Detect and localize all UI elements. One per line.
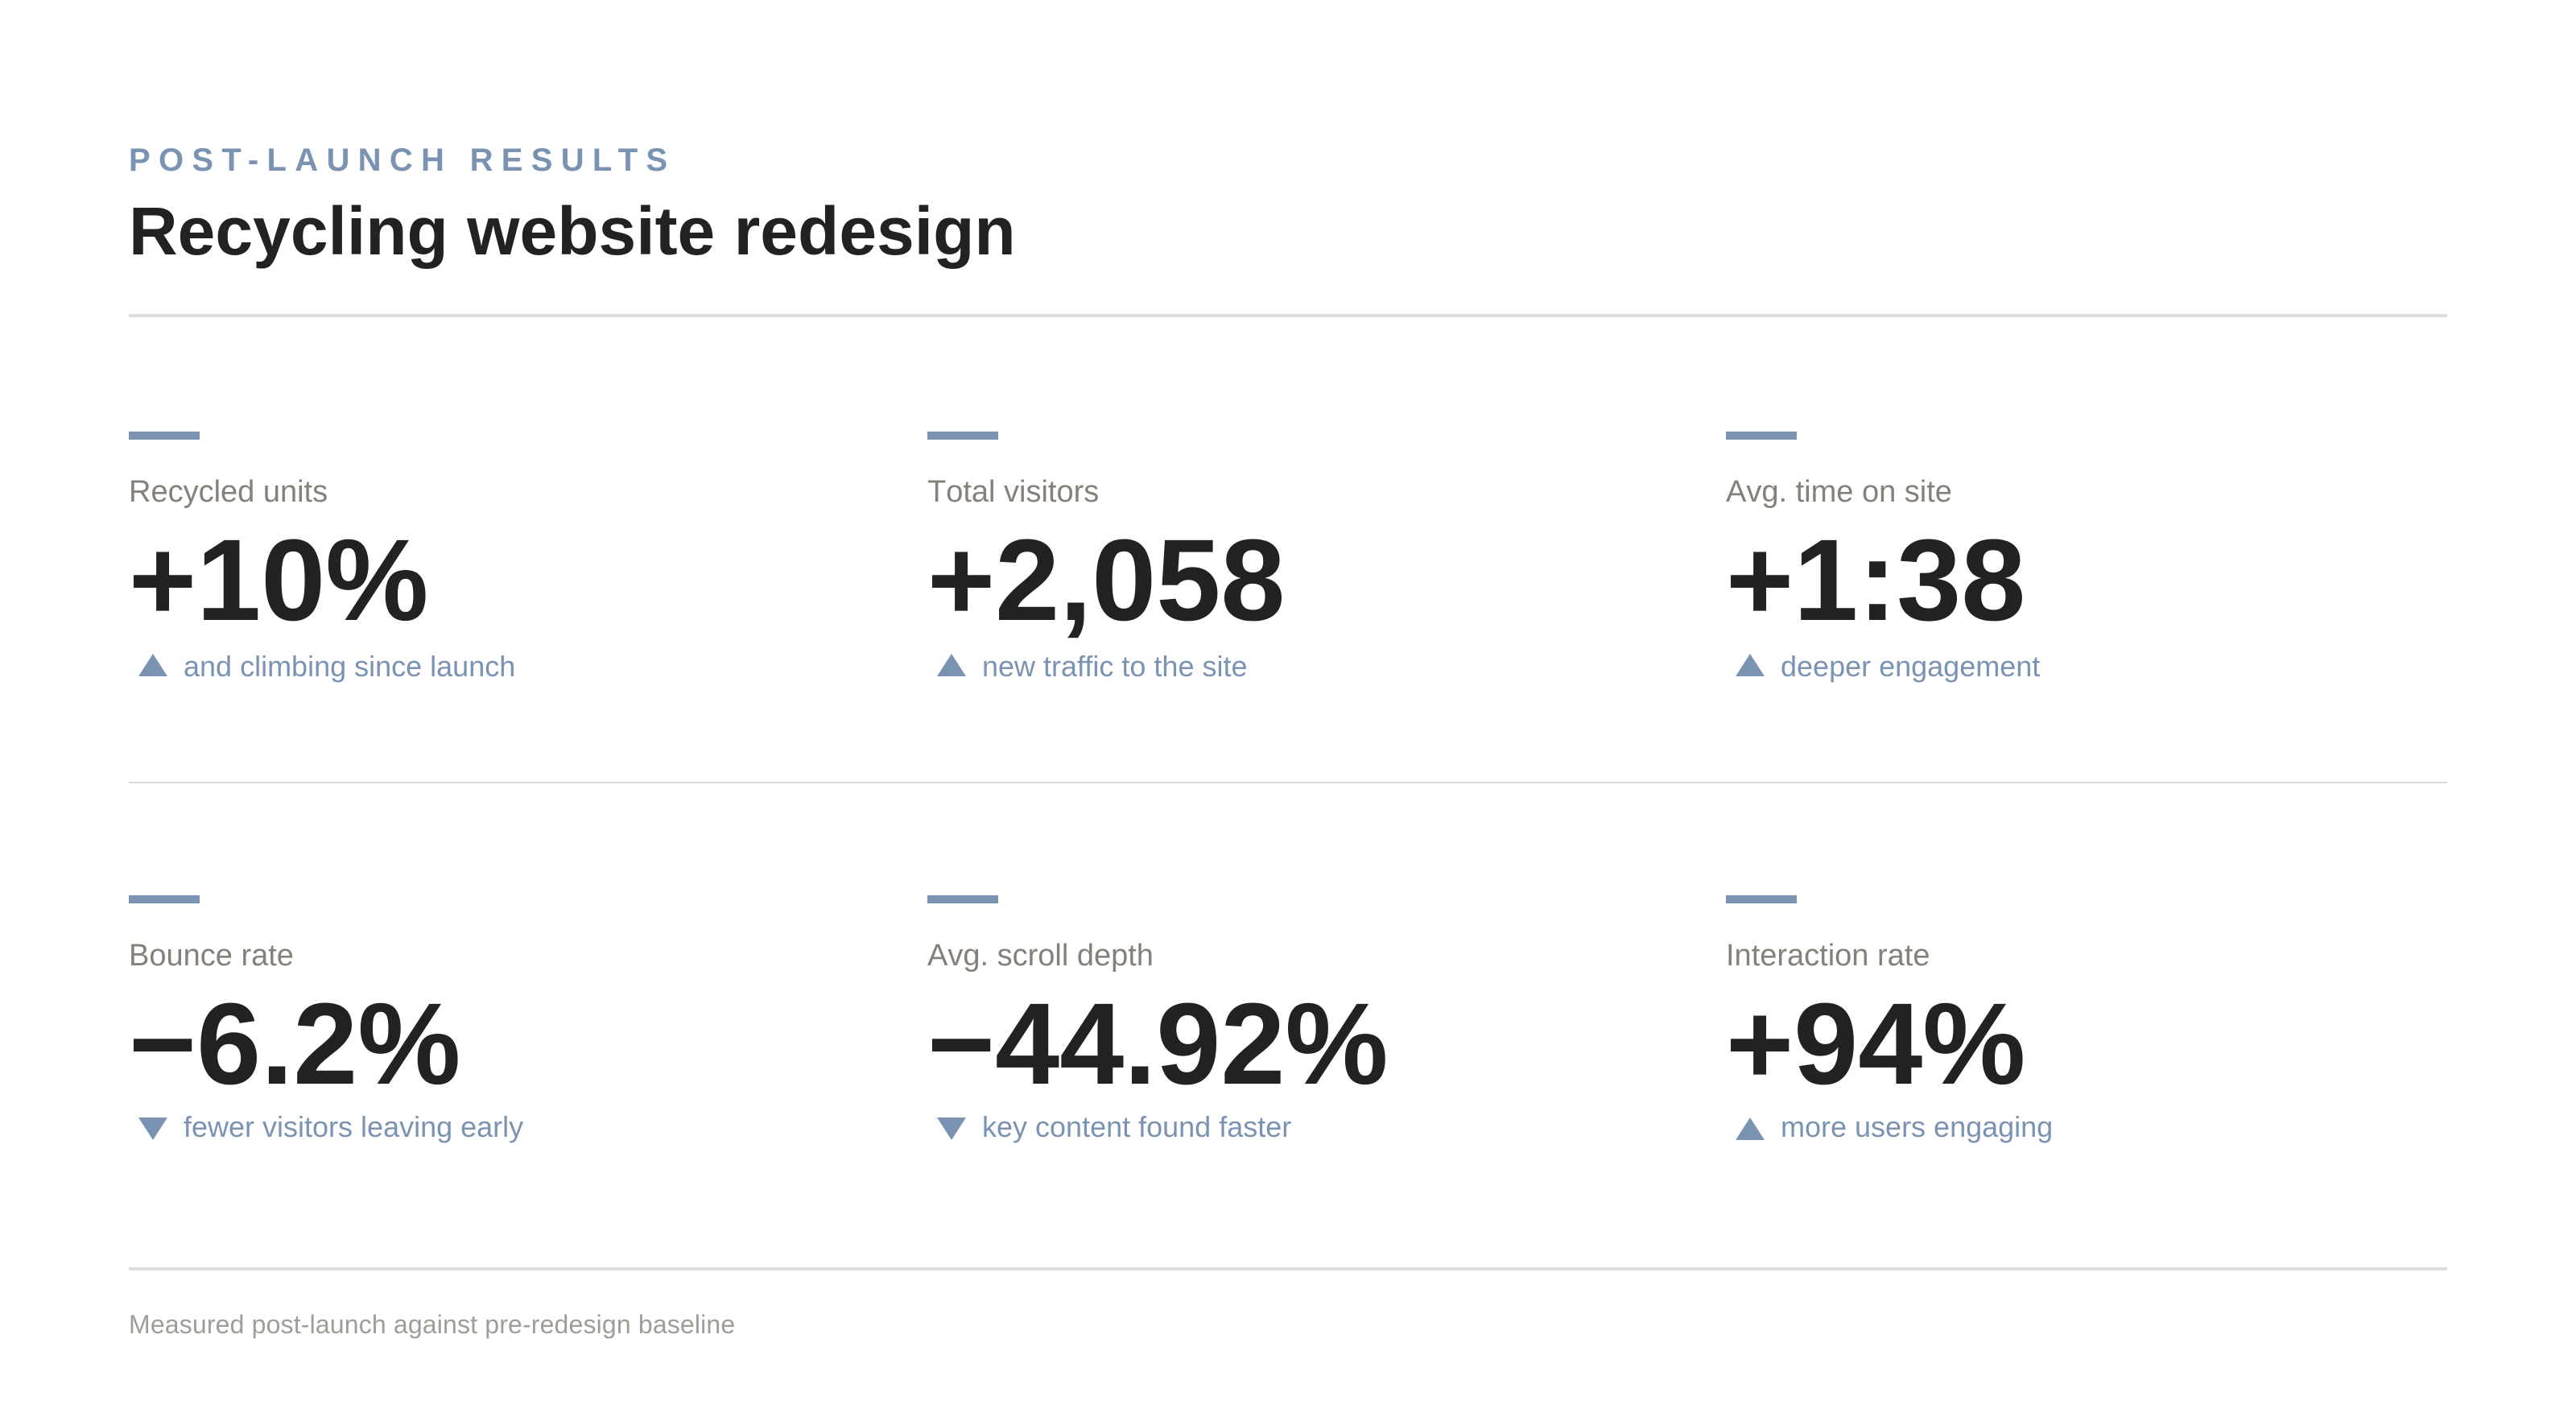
- icon: down triangle: [937, 1117, 966, 1140]
- note: deeper engagement: [1781, 650, 2040, 683]
- icon: up triangle: [1736, 654, 1765, 676]
- title: Recycling website redesign: [129, 193, 1016, 269]
- value: +2,058: [927, 515, 1285, 645]
- icon: down triangle: [138, 1117, 167, 1140]
- label: Bounce rate: [129, 939, 294, 973]
- panel: interaction rate: [1726, 895, 2053, 1143]
- panel: recycled units: [129, 432, 515, 683]
- value: −6.2%: [129, 979, 460, 1109]
- panel: average time on site: [1726, 432, 2040, 683]
- note: key content found faster: [982, 1110, 1291, 1143]
- label: Total visitors: [927, 475, 1099, 509]
- value: +94%: [1726, 979, 2025, 1109]
- footnote: Measured post-launch against pre-redesign baseline: [129, 1310, 735, 1339]
- value: +10%: [129, 515, 428, 645]
- label: Recycled units: [129, 475, 328, 509]
- panel: bounce rate: [129, 895, 523, 1143]
- label: Avg. scroll depth: [927, 939, 1154, 973]
- label: Interaction rate: [1726, 939, 1930, 973]
- value: +1:38: [1726, 515, 2025, 645]
- icon: up triangle: [937, 654, 966, 676]
- panel: total visitors: [927, 432, 1285, 683]
- note: and climbing since launch: [184, 650, 515, 683]
- note: fewer visitors leaving early: [184, 1110, 523, 1143]
- note: more users engaging: [1781, 1110, 2053, 1143]
- value: −44.92%: [927, 979, 1388, 1109]
- icon: up triangle: [138, 654, 167, 676]
- icon: up triangle: [1736, 1117, 1765, 1140]
- note: new traffic to the site: [982, 650, 1248, 683]
- eyebrow: POST-LAUNCH RESULTS: [129, 143, 675, 178]
- label: Avg. time on site: [1726, 475, 1952, 509]
- panel: average scroll depth: [927, 895, 1388, 1143]
